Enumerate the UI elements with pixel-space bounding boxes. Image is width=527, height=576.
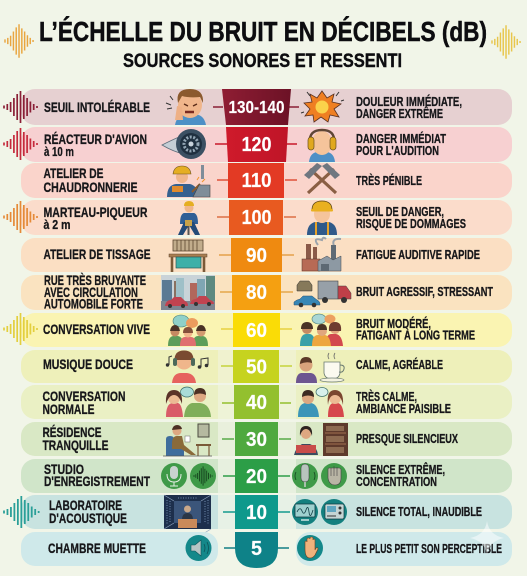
scale segment: 30 (246, 429, 267, 451)
source label (44, 131, 147, 159)
source label: à 10 m (44, 145, 74, 159)
waveform (4, 313, 37, 345)
source label: TRANQUILLE (42, 437, 108, 453)
effect text (356, 204, 466, 231)
connector (217, 216, 296, 218)
scale segment: 120 (242, 134, 272, 156)
source label: RÉSIDENCE (42, 424, 102, 440)
icon: hand badge (297, 535, 323, 561)
effect text: SILENCE EXTRÊME, (356, 462, 445, 477)
icon: couple talking (298, 388, 344, 417)
panel: row 5 dB (21, 532, 512, 568)
effect text: DOULEUR IMMÉDIATE, (356, 94, 462, 109)
waveform (4, 496, 39, 528)
panel: row 90 dB (21, 238, 512, 272)
icon: helmet worker (307, 201, 337, 235)
icon: explosion (301, 91, 344, 122)
source label (44, 204, 148, 232)
scale segment (235, 422, 278, 456)
effect text (356, 94, 462, 121)
connector (213, 106, 299, 108)
effect text (356, 462, 445, 489)
source label: CONVERSATION (42, 388, 126, 404)
source label: D'ACOUSTIQUE (49, 510, 127, 526)
scale segment: 5 (251, 538, 262, 560)
source label: AVEC CIRCULATION (44, 284, 138, 300)
icon: monitor badge (292, 499, 318, 525)
effect text: CONCENTRATION (356, 474, 437, 489)
source label (42, 388, 126, 417)
scale segment: 50 (246, 356, 267, 378)
source label (44, 461, 150, 489)
waveform (4, 91, 37, 123)
effect text: DANGER EXTRÊME (356, 106, 443, 121)
icon: reader in armchair (163, 424, 212, 456)
effect text: FATIGANT À LONG TERME (356, 328, 475, 342)
source label (44, 272, 146, 312)
icon: title waveform left (5, 24, 33, 58)
source label: ATELIER DE (44, 165, 104, 181)
connector (222, 438, 291, 440)
icon: two people talking (166, 387, 211, 417)
icon: group talking (168, 315, 208, 346)
effect text: DANGER IMMÉDIAT (356, 131, 446, 146)
scale segment: 40 (246, 392, 267, 414)
source label: SEUIL INTOLÉRABLE (44, 99, 150, 115)
scale segment: 130-140 (228, 97, 285, 117)
panel: row 10 dB (4, 495, 512, 535)
connector (222, 402, 291, 404)
panel: row 60 dB (4, 313, 512, 347)
icon: jet engine (162, 129, 206, 159)
scale segment (231, 238, 282, 272)
panel: row 100 dB (4, 200, 512, 235)
source label: CONVERSATION VIVE (43, 321, 150, 337)
source label (49, 497, 127, 526)
icon: welder (167, 165, 210, 197)
connector (221, 328, 292, 330)
effect text: PRESQUE SILENCIEUX (356, 431, 458, 446)
icon: listening to music (166, 351, 208, 383)
icon: cars and truck (294, 281, 351, 307)
icon: friends talking (300, 314, 343, 346)
effect text (356, 316, 475, 342)
scale segment: 60 (246, 320, 267, 342)
connector (215, 143, 297, 145)
panel: row 20 dB (21, 459, 512, 493)
connector (221, 365, 292, 367)
scale segment: 110 (242, 170, 272, 192)
source label: RUE TRÈS BRUYANTE (44, 272, 146, 288)
icon: microphone (161, 463, 187, 489)
effect text: AMBIANCE PAISIBLE (356, 401, 451, 416)
source label (44, 165, 138, 195)
connector (223, 511, 290, 513)
source label: AUTOMOBILE FORTE (44, 296, 143, 312)
icon: reader and bookcase (294, 423, 348, 456)
source label: MUSIQUE DOUCE (43, 356, 133, 372)
icon: loom (169, 240, 207, 272)
scale segment: 100 (242, 207, 272, 229)
panel: row 130-140 dB (4, 89, 512, 125)
connector (217, 179, 297, 181)
source label: NORMALE (42, 401, 94, 417)
scale segment (226, 127, 288, 162)
source label (42, 424, 108, 453)
icon: busy street (161, 275, 215, 310)
effect text: TRÈS CALME, (356, 389, 417, 404)
effect text: POUR L'AUDITION (356, 143, 439, 158)
scale segment: 80 (246, 282, 267, 304)
scale segment (235, 532, 278, 568)
icon: crossed hammers (304, 163, 340, 193)
scale segment (235, 495, 278, 529)
icon: jackhammer worker (178, 201, 200, 235)
effect text: SEUIL DE DANGER, (356, 204, 444, 219)
connector (224, 547, 289, 549)
scale segment (235, 459, 278, 493)
source label: MARTEAU-PIQUEUR (44, 204, 148, 220)
panel: row 110 dB (21, 163, 512, 198)
icon: anechoic room (164, 495, 211, 535)
scale segment: 90 (246, 245, 267, 267)
waveform (4, 201, 37, 233)
scale segment (228, 163, 284, 198)
effect text: TRÈS PÉNIBLE (356, 173, 422, 188)
effect text: BRUIT MODÉRÉ, (356, 316, 431, 331)
effect text: FATIGUE AUDITIVE RAPIDE (356, 247, 480, 262)
effect text (356, 131, 446, 158)
scale segment (222, 89, 291, 125)
scale segment: 10 (246, 502, 267, 524)
effect text (356, 389, 451, 416)
scale segment: 20 (246, 466, 267, 488)
panel: row 30 dB (21, 422, 512, 456)
source label: D'ENREGISTREMENT (44, 473, 150, 489)
scale segment (234, 385, 279, 419)
panel: row 120 dB (4, 127, 512, 162)
waveform (4, 128, 37, 160)
source label: RÉACTEUR D'AVION (44, 131, 147, 147)
icon: meter badge (321, 499, 347, 525)
panel: row 80 dB (21, 272, 512, 312)
icon: title waveform right (492, 25, 520, 59)
icon: speaker badge (186, 535, 212, 561)
scale segment (233, 350, 279, 383)
icon: sound wave badge (190, 463, 216, 489)
source label: à 2 m (44, 218, 70, 232)
icon: person in pain (166, 89, 206, 125)
icon: ear protection (308, 130, 336, 162)
subtitle: SOURCES SONORES ET RESSENTI (123, 51, 402, 72)
scale segment (233, 313, 280, 347)
connector (220, 291, 293, 293)
panel: row 40 dB (21, 385, 512, 419)
effect text: RISQUE DE DOMMAGES (356, 216, 466, 231)
effect text: CALME, AGRÉABLE (356, 357, 443, 372)
scale segment (229, 200, 283, 235)
source label: LABORATOIRE (49, 497, 122, 513)
panel: row 50 dB (21, 350, 512, 383)
icon: man with coffee (296, 353, 344, 383)
watermark sparkle (470, 521, 504, 555)
connector (223, 475, 290, 477)
source label: CHAUDRONNERIE (44, 179, 138, 195)
source label: ATELIER DE TISSAGE (44, 246, 150, 262)
source label: CHAMBRE MUETTE (48, 540, 146, 556)
icon: factory (302, 238, 341, 271)
icon: hand badge (321, 463, 347, 489)
scale segment (232, 275, 281, 310)
source label: STUDIO (44, 461, 84, 477)
connector (219, 254, 294, 256)
icon: studio microphone (292, 463, 318, 489)
